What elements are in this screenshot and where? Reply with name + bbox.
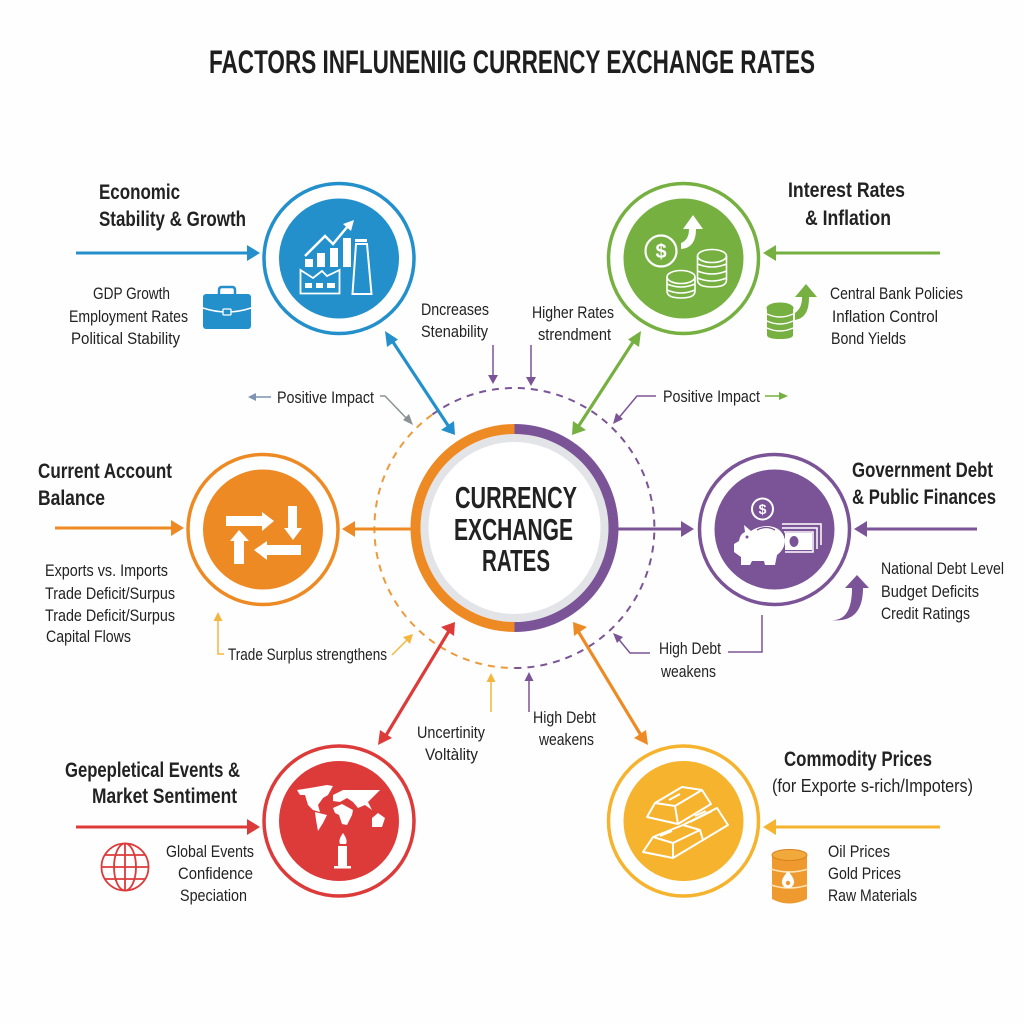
input arrow [76,245,260,261]
icon circle: gold bars [608,746,758,896]
centre hub: currency exchange rates [410,424,618,632]
dashed ring around the centre [374,388,654,668]
heading: Government Debt [852,459,993,482]
factor list: Political Stability [71,329,180,348]
heading [852,459,996,509]
callout: uncertainty volatility [417,673,496,764]
arrow: commodity prices to and from centre [573,622,648,745]
icon circle: trade arrows [188,454,338,604]
icon circle: chart and factory [264,184,414,334]
factor list [45,561,175,646]
input arrow [854,521,977,537]
callout: high debt weakens right: High Debt [659,639,721,658]
input arrow [76,819,260,835]
callout: increases stability [421,300,498,384]
factor list: Oil Prices [828,842,890,861]
arrow: economic stability to and from centre [385,331,455,435]
panel: commodity prices [608,746,973,905]
heading: Economic [99,181,180,204]
factor list: Trade Deficit/Surpus [45,606,175,625]
callout: higher rates strengthen [526,303,614,386]
factor list: Capital Flows [46,627,131,646]
panel: economic stability and growth [69,181,414,348]
factor list: GDP Growth [93,284,170,303]
factor list: Global Events [166,842,254,861]
callout: positive impact left [248,388,413,425]
icon circle: dollar and coins: $ [655,241,667,263]
heading [65,759,240,808]
callout: positive impact right: Positive Impact [663,387,760,406]
heading [788,179,905,230]
factor list: Gold Prices [828,864,901,883]
heading: Commodity Prices [784,748,932,771]
callout: high debt weakens bottom: High Debt [533,708,596,727]
arrow: geopolitical events to and from centre [378,622,455,745]
factor list: Confidence [178,864,253,883]
factor list [69,284,188,348]
arrow: interest rates to and from centre [572,331,641,435]
factor list [166,842,254,905]
centre hub: currency exchange rates: RATES [482,543,550,578]
heading: Balance [38,487,105,510]
factor list [830,284,963,348]
arrow: centre to government debt [618,521,694,537]
input arrow [763,819,940,835]
callout: uncertainty volatility: Voltàlity [425,745,478,764]
icon circle: world map and candle [264,746,414,896]
factor list: Budget Deficits [881,582,979,601]
callout: increases stability: Dncreases [421,300,489,319]
callout: high debt weakens bottom: weakens [538,730,594,749]
icon: briefcase [203,287,251,329]
icon: oil barrel [771,850,808,904]
callout: higher rates strengthen: Higher Rates [532,303,614,322]
callout: high debt weakens bottom [524,672,596,749]
panel: government debt and public finances [700,454,1004,623]
callout: uncertainty volatility: Uncertinity [417,723,485,742]
callout: higher rates strengthen: strendment [538,325,611,344]
input arrow [763,245,940,261]
heading: (for Exporte s-rich/Impoters) [772,776,973,796]
heading: & Inflation [805,207,891,230]
heading: Market Sentiment [92,785,237,808]
factor list: Employment Rates [69,307,188,326]
heading [99,181,246,231]
factor list [881,559,1004,623]
centre hub: currency exchange rates: CURRENCY [455,480,577,515]
callout: positive impact left: Positive Impact [277,388,374,407]
factor list: Bond Yields [831,329,906,348]
centre hub: currency exchange rates: EXCHANGE [454,512,573,547]
factor list: Exports vs. Imports [45,561,168,580]
heading [38,460,172,510]
arrow: centre to current account [342,521,411,537]
icon: coins and arrow [766,284,817,339]
heading: Current Account [38,460,172,483]
factor list: Speciation [180,886,247,905]
callout: high debt weakens right: weakens [660,662,716,681]
callout: trade surplus strengthens [214,612,413,664]
heading: Stability & Growth [99,208,246,231]
factor list: Credit Ratings [881,604,970,623]
panel: interest rates and inflation [608,179,963,348]
callout: increases stability: Stenability [421,322,488,341]
icon circle: piggy bank and cash [700,454,850,604]
heading: Gepepletical Events & [65,759,240,782]
callout: trade surplus strengthens: Trade Surplus strengthens [228,645,387,664]
factor list: Inflation Control [832,307,938,326]
panel: geopolitical events and market sentiment [65,746,414,905]
icon: curved arrow [830,575,869,620]
heading: Interest Rates [788,179,905,202]
factor list: Central Bank Policies [830,284,963,303]
input arrow [55,520,184,536]
factor list [828,842,917,905]
factor list: Raw Materials [828,886,917,905]
panel: current account balance [38,454,338,646]
icon circle: dollar and coins [608,184,758,334]
heading [772,748,973,796]
callout: high debt weakens right [613,615,762,681]
callout: positive impact right [613,387,788,424]
factor list: Trade Deficit/Surpus [45,584,175,603]
icon circle: piggy bank and cash: $ [759,501,767,517]
icon: globe [102,844,148,890]
